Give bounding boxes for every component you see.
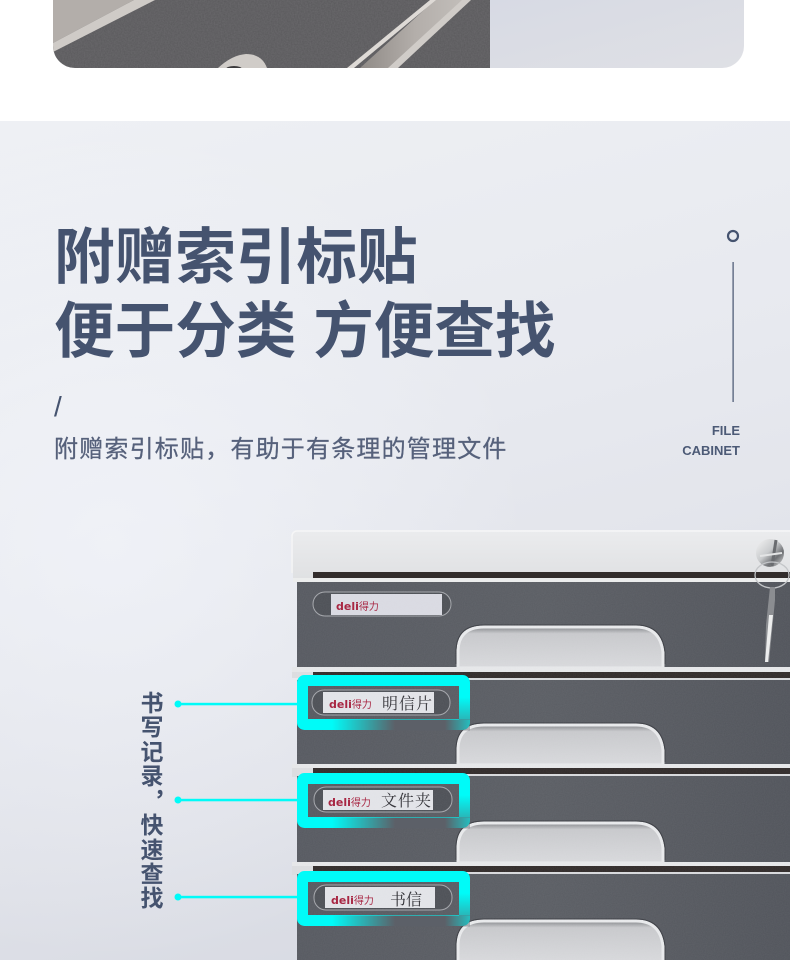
FILE CABINET label: CABINET [682, 443, 740, 458]
drawer 4 [297, 874, 790, 960]
drawer 3 [292, 776, 790, 875]
drawer 1: deli得力 [336, 598, 379, 613]
drawer 3: 文件夹 [381, 788, 432, 811]
vertical caption: 录 [140, 763, 164, 789]
title: 便于分类 方便查找 [54, 297, 556, 365]
lock and key [755, 539, 789, 662]
vertical caption: 书 [140, 690, 164, 716]
FILE CABINET label: FILE [712, 423, 740, 438]
connector 1 [174, 700, 298, 708]
callout frame: 明信片 [302, 680, 470, 730]
vertical caption: 写 [140, 714, 164, 740]
connector 2 [174, 796, 298, 804]
drawer 2: deli得力 [329, 696, 372, 711]
vertical caption: 查 [140, 861, 164, 887]
drawer 3: deli得力 [328, 794, 371, 809]
vertical caption: 记 [140, 739, 164, 765]
vertical caption: 快 [140, 812, 164, 838]
vertical caption: 速 [140, 837, 164, 863]
drawer 1 [292, 582, 790, 680]
vertical caption: 找 [140, 885, 164, 911]
drawer 4: 书信 [390, 887, 422, 910]
vertical caption [140, 690, 176, 911]
drawer 2: 明信片 [382, 691, 433, 714]
decor: ring and rule [726, 230, 740, 402]
top product photo crop [53, 0, 744, 68]
slash: / [54, 391, 62, 422]
drawer 2 [292, 680, 790, 777]
callout frame: 书信 [302, 876, 470, 926]
drawer 4: deli得力 [331, 892, 374, 907]
title: 附赠索引标贴 [54, 223, 418, 291]
title [54, 223, 556, 365]
subtitle: 附赠索引标贴，有助于有条理的管理文件 [54, 436, 508, 463]
callout frame: 文件夹 [302, 778, 470, 828]
cabinet lid [291, 530, 790, 582]
drawer texture [297, 582, 790, 960]
vertical caption: ， [154, 774, 176, 800]
connector 3 [174, 894, 298, 900]
FILE CABINET label [682, 423, 740, 458]
